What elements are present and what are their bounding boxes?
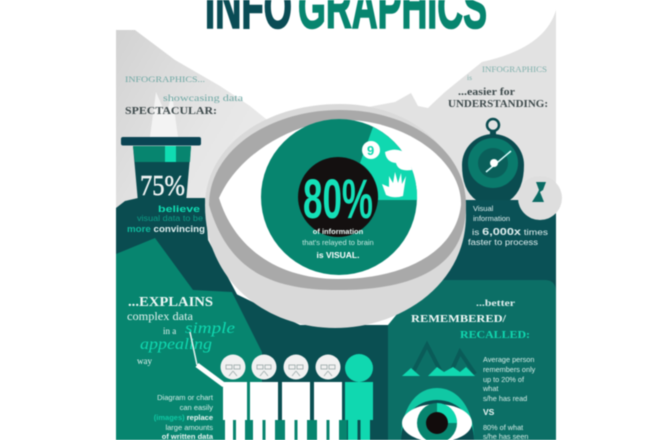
icon: rabbit ears <box>150 92 178 137</box>
hat band <box>133 146 191 162</box>
text: images replace: (images) replace <box>154 413 213 422</box>
icon: lips <box>385 150 412 170</box>
panel: grey background left <box>116 30 336 260</box>
body <box>223 382 247 440</box>
stem <box>490 130 496 136</box>
text: understanding: UNDERSTANDING: <box>448 99 548 110</box>
text: more convincing: more convincing <box>127 224 205 235</box>
icon: arm <box>197 365 224 385</box>
brow <box>401 388 474 440</box>
glasses <box>289 365 303 376</box>
speech bubble <box>116 0 556 128</box>
text: is visual: is VISUAL. <box>317 250 359 260</box>
coin <box>362 141 380 159</box>
inner dial <box>478 148 508 178</box>
text: way: way <box>137 356 152 366</box>
hat body <box>133 146 191 202</box>
text: stats <box>482 355 536 440</box>
text: infographics: INFOGRAPHICS <box>482 65 547 74</box>
body <box>250 382 278 440</box>
text: easier for: ...easier for <box>458 87 516 98</box>
hub <box>490 159 498 167</box>
text: of information: of information <box>313 227 364 236</box>
dial <box>468 138 518 188</box>
panel: dark teal right band <box>440 200 556 282</box>
icon: books <box>402 345 475 376</box>
iris bright segment <box>360 127 417 200</box>
coin symbol: 9 <box>367 143 374 158</box>
text: information: information <box>473 214 510 223</box>
icon: hat <box>121 137 201 202</box>
line: Average person <box>483 355 534 364</box>
book shapes <box>412 345 475 374</box>
panel: remembered <box>401 299 536 440</box>
hat brim <box>121 137 201 146</box>
head <box>252 354 276 380</box>
eye outer lid <box>205 104 466 328</box>
text: better: ...better <box>476 299 516 309</box>
icon: hand <box>382 172 406 197</box>
iris highlight <box>437 403 457 423</box>
head <box>345 354 373 382</box>
title <box>205 0 487 42</box>
iris <box>261 119 417 275</box>
text: recalled: RECALLED: <box>460 330 530 341</box>
iris <box>417 403 457 440</box>
stat: 75%: 75% <box>140 170 185 202</box>
text: 6000x: is 6,000x times <box>472 227 548 238</box>
panel: understanding <box>448 65 562 247</box>
figures <box>220 354 373 440</box>
lid <box>401 400 474 440</box>
text: complex data: complex data <box>127 309 194 323</box>
text: showcasing data: showcasing data <box>163 93 243 103</box>
panel: green strip under figures <box>222 420 347 440</box>
glasses <box>257 365 271 376</box>
head <box>220 354 246 380</box>
pupil <box>426 412 448 434</box>
panel: green left section <box>116 238 275 440</box>
text: spectacular: SPECTACULAR: <box>125 106 217 117</box>
glasses <box>321 365 335 376</box>
text: faster: faster to process <box>468 237 538 247</box>
figure 3 <box>282 354 310 440</box>
sclera <box>402 404 472 440</box>
line: VS <box>483 407 495 417</box>
line: what <box>482 384 498 393</box>
hat band highlight <box>165 146 176 162</box>
icon: pointer <box>190 332 197 365</box>
text: diagram or chart: Diagram or chart <box>157 393 214 402</box>
text: appealing: appealing <box>140 336 212 353</box>
glasses <box>226 365 240 376</box>
knob <box>487 119 499 131</box>
text: can easily: can easily <box>180 403 213 412</box>
figure 1 <box>220 354 247 440</box>
icon: hourglass badge <box>518 176 562 220</box>
text: visual data: visual data to be <box>137 214 204 223</box>
line: up to 20% of <box>483 375 525 384</box>
case <box>462 134 524 200</box>
panel: explains <box>127 294 235 440</box>
eye white <box>219 120 461 279</box>
panel: grey background right <box>336 10 556 240</box>
icon: stopwatch <box>462 119 524 200</box>
panel: remembered section <box>388 280 556 440</box>
text: believe: believe <box>158 204 200 215</box>
figure 2 <box>250 354 278 440</box>
figure 5 highlighted <box>345 354 373 440</box>
text: in a: in a <box>163 326 176 336</box>
text: explains: ...EXPLAINS <box>128 294 213 309</box>
line: 80% of what <box>483 423 523 432</box>
icon: dollar coin <box>362 141 380 159</box>
text: large amounts: large amounts <box>165 423 213 432</box>
figure 4 <box>314 354 342 440</box>
eye lid shadow <box>209 110 466 290</box>
panel: spectacular <box>121 75 243 235</box>
text: is: is <box>467 73 472 82</box>
text: relayed to brain: that's relayed to brain <box>302 238 374 247</box>
text: infographics: INFOGRAPHICS... <box>125 75 205 84</box>
hand <box>486 151 511 172</box>
head <box>316 354 340 380</box>
text: remembered: REMEMBERED/ <box>411 314 506 325</box>
hourglass <box>532 182 546 202</box>
panel: dark teal left band <box>116 198 270 360</box>
text: visual: Visual <box>473 204 494 213</box>
book bases <box>402 367 475 376</box>
body <box>314 382 342 440</box>
text: simple: simple <box>185 320 235 337</box>
stat: 80%: 80% <box>303 167 373 230</box>
badge <box>518 176 562 220</box>
icon: small eye <box>401 388 474 440</box>
panel: dark centre base <box>232 280 556 440</box>
body <box>282 382 310 440</box>
line: remembers only <box>483 365 536 374</box>
body <box>345 382 373 440</box>
line: s/he has read <box>483 394 527 403</box>
pupil <box>298 157 378 237</box>
eye <box>205 104 466 328</box>
head <box>284 354 308 380</box>
